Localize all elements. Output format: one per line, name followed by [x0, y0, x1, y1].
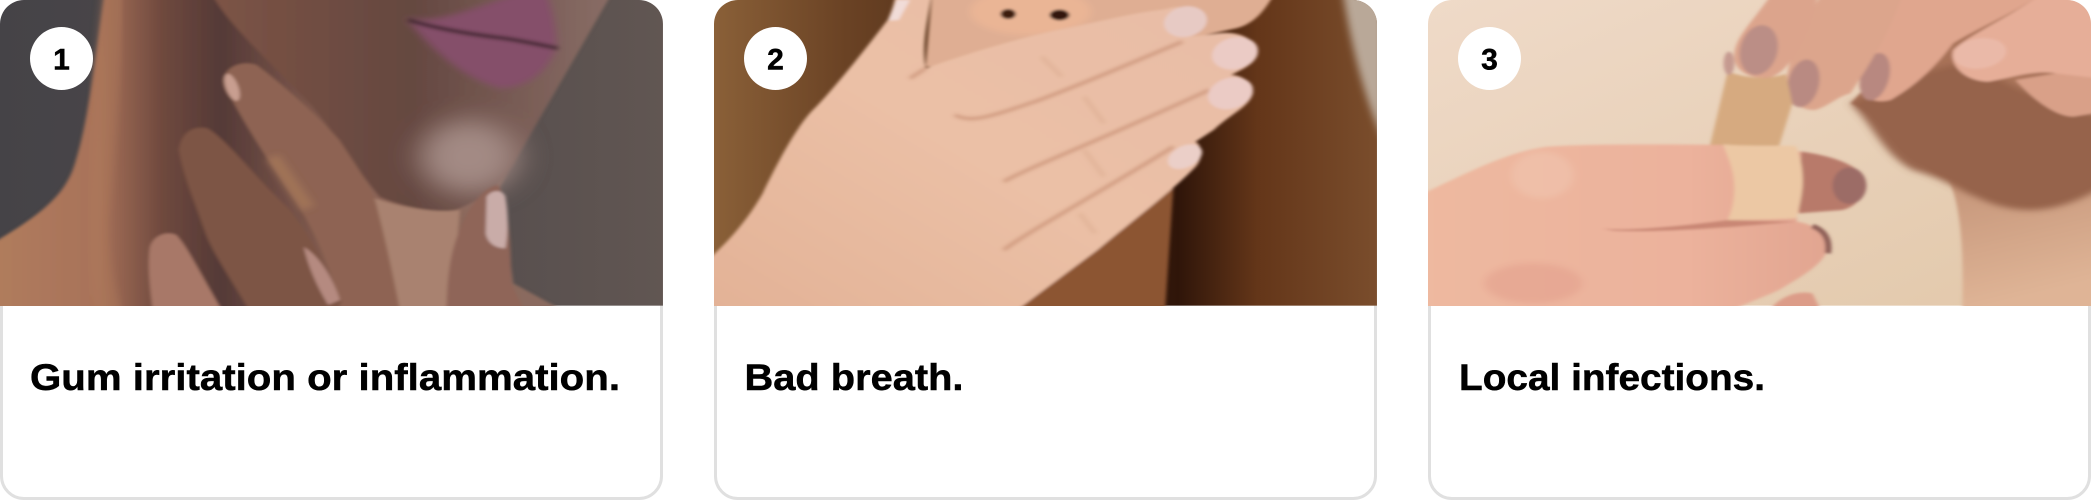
badge 2	[744, 27, 807, 90]
bandage strip	[1710, 72, 1792, 147]
badge 3: 3	[1481, 44, 1498, 76]
thumb	[446, 186, 512, 306]
finger shadows	[910, 42, 1209, 250]
badge 3	[1458, 27, 1521, 90]
heading: gum irritation: Gum irritation or inflammation.	[30, 357, 620, 398]
panel: card 1 gum irritation	[0, 0, 663, 499]
nails	[1163, 5, 1208, 38]
panel: card 3 local infections	[1413, 0, 2091, 499]
ring finger	[147, 232, 222, 306]
heading: bad breath: Bad breath.	[744, 357, 964, 398]
photo: fingers on jaw and neck	[0, 0, 663, 320]
heading: local infections: Local infections.	[1459, 357, 1765, 398]
badge 2: 2	[767, 44, 784, 76]
card 3 frame	[1430, 300, 2090, 498]
left hand	[1428, 144, 1826, 306]
right hand	[1850, 0, 2091, 320]
bandage wrap	[1723, 144, 1803, 220]
photo: bandage on finger	[1413, 0, 2091, 320]
badge 1	[30, 27, 93, 90]
card 1 frame	[2, 300, 662, 498]
middle finger	[179, 128, 342, 320]
face and nose	[926, 0, 1276, 67]
panel: card 2 bad breath	[700, 0, 1383, 499]
card 2 frame	[716, 300, 1376, 498]
hand	[700, 0, 1257, 320]
photo: hand covering mouth	[700, 0, 1383, 320]
index finger	[223, 63, 402, 320]
badge 1: 1	[53, 44, 70, 76]
